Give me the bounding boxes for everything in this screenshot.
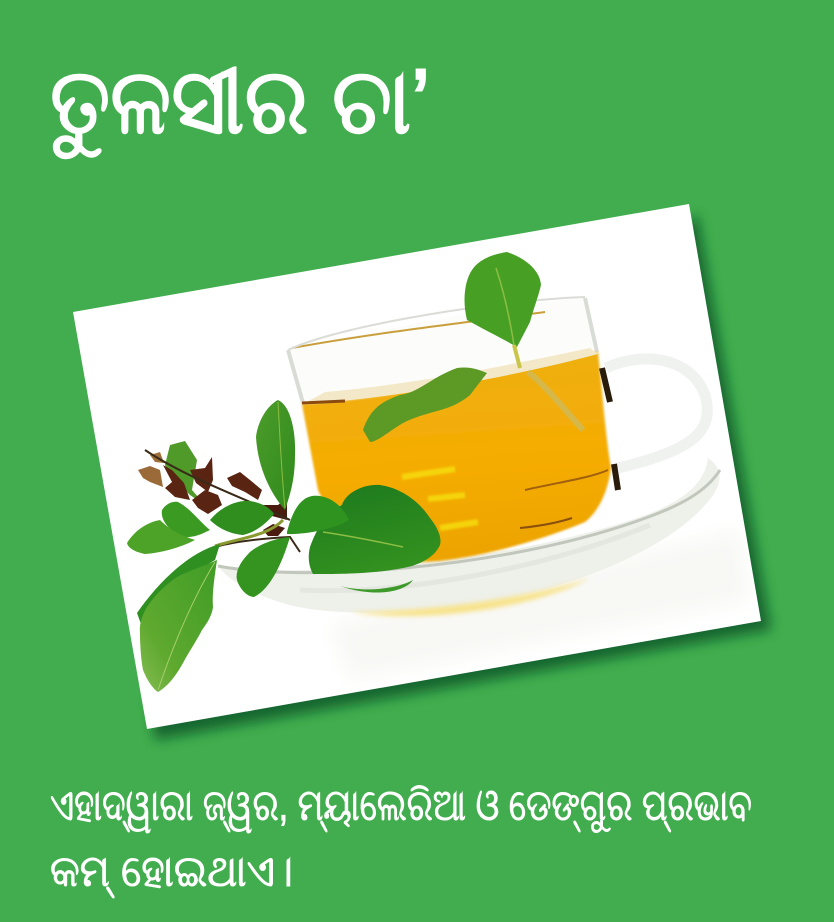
body text xyxy=(50,781,752,898)
leaf in tea xyxy=(363,367,487,442)
dried flower spike xyxy=(138,441,287,536)
infographic xyxy=(50,66,776,898)
leaf bottom large xyxy=(140,560,217,692)
cup glass xyxy=(288,297,612,552)
leaf lower center xyxy=(237,537,290,597)
photo background xyxy=(73,204,761,729)
leaf large round xyxy=(309,485,441,593)
leaf left lower xyxy=(127,520,195,554)
top leaf xyxy=(465,252,583,430)
leaf narrow xyxy=(137,544,220,624)
tea liquid xyxy=(302,348,618,562)
photo shadow xyxy=(150,214,771,740)
leaf right small xyxy=(287,496,349,534)
photo: tulsi tea xyxy=(73,204,771,740)
stems xyxy=(145,450,300,552)
tulsi sprig xyxy=(127,400,441,692)
leaf middle xyxy=(210,501,274,535)
title: ତୁଳସୀର ଚ‌ା’ xyxy=(50,51,430,159)
leaf left upper xyxy=(162,502,210,537)
saucer xyxy=(218,458,720,616)
table reflection xyxy=(344,532,756,668)
leaf upright xyxy=(256,400,295,510)
line 2: କମ୍ ହୋଇଥ‌ାଏ। xyxy=(50,847,293,898)
cup handle xyxy=(606,359,707,468)
